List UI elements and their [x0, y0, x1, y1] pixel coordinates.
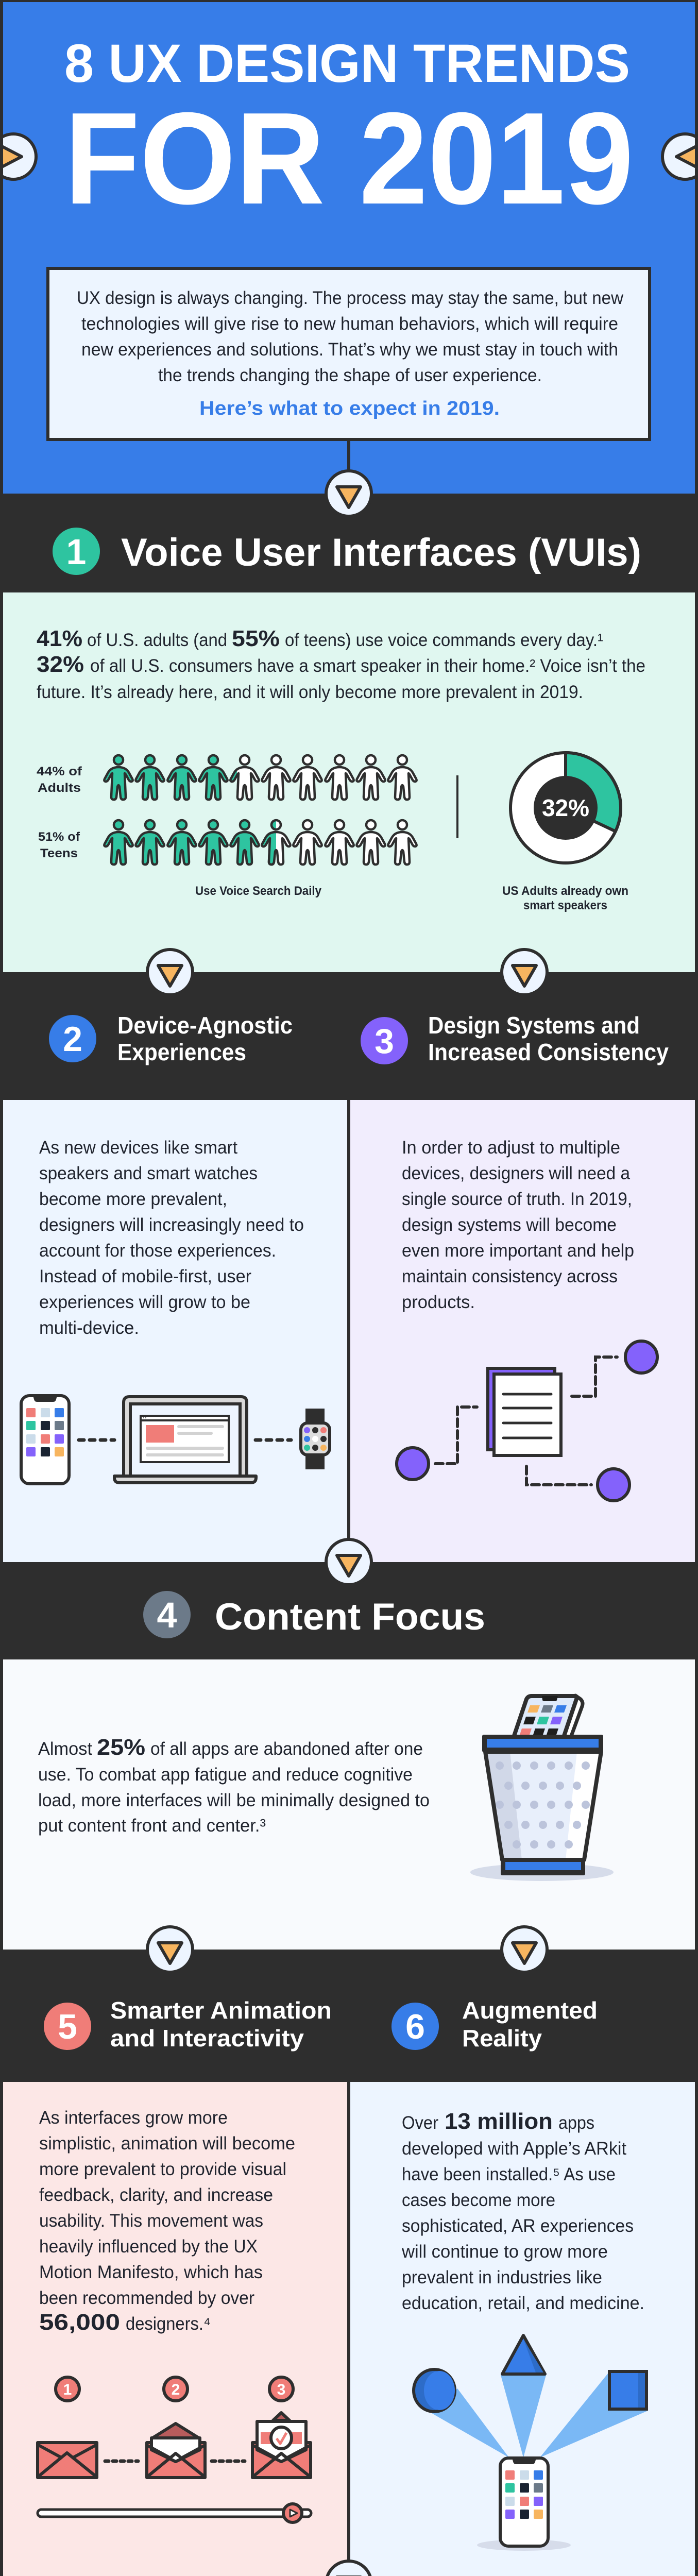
- body text: [38, 1735, 430, 1836]
- body text: usability. This movement was: [39, 2211, 263, 2231]
- section 3 heading: Increased Consistency: [428, 1039, 669, 1065]
- connector dots: [105, 2460, 138, 2463]
- body text: As new devices like smart: [39, 1138, 237, 1158]
- body text: education, retail, and medicine.: [402, 2293, 644, 2313]
- body text: load, more interfaces will be minimally designed to: [38, 1790, 430, 1810]
- stat text: 41%: [37, 626, 82, 651]
- arrow: sections 2 and 3 to section 4: [326, 1539, 371, 1585]
- icon: document stack with nodes: [397, 1341, 657, 1501]
- body text: simplistic, animation will become: [39, 2133, 295, 2154]
- header panel: [0, 2, 698, 494]
- section 4 heading: 4: [157, 1595, 177, 1635]
- body text: As interfaces grow more: [39, 2108, 228, 2128]
- arrow: section 1 to section 3: [502, 950, 547, 995]
- pictogram row labels: Teens: [40, 846, 78, 860]
- body text: feedback, clarity, and increase: [39, 2185, 273, 2205]
- section 6 heading: Augmented: [462, 1997, 598, 2024]
- arrow: sections 5 and 6 to section 7: [326, 2561, 371, 2576]
- body text: designers will increasingly need to: [39, 1215, 304, 1235]
- body text: 13 million: [445, 2109, 553, 2134]
- body text: 25%: [97, 1735, 145, 1760]
- intro box: UX design is always changing. The process may stay the same, but new: [77, 288, 624, 308]
- intro box: new experiences and solutions. That’s why we must stay in touch with: [81, 340, 618, 360]
- body text: Motion Manifesto, which has: [39, 2262, 263, 2282]
- body text: become more prevalent,: [39, 1189, 227, 1209]
- section 1 heading: Voice User Interfaces (VUIs): [121, 531, 641, 574]
- animation slider: [38, 2504, 311, 2522]
- section 4 heading: Content Focus: [215, 1596, 485, 1638]
- icon: ar sphere: [414, 2369, 455, 2412]
- arrow: section 1 to section 2: [147, 950, 193, 995]
- stat text: of all U.S. consumers have a smart speaker in their home.² Voice isn’t the: [90, 656, 645, 676]
- connector: laptop to watch: [256, 1438, 291, 1442]
- icon: ar cone: [502, 2335, 545, 2374]
- pictogram row labels: 51% of: [38, 830, 80, 844]
- body text: Instead of mobile-first, user: [39, 1266, 251, 1286]
- section 1 heading: 1: [66, 532, 86, 572]
- body text: more prevalent to provide visual: [39, 2159, 286, 2179]
- body text: will continue to grow more: [401, 2242, 608, 2262]
- section 5 heading: Smarter Animation: [110, 1997, 332, 2024]
- body text: use. To combat app fatigue and reduce cognitive: [38, 1765, 413, 1785]
- body text: 56,000: [39, 2310, 120, 2335]
- stat text: 55%: [232, 626, 280, 651]
- body text: sophisticated, AR experiences: [402, 2216, 634, 2236]
- intro box: Here’s what to expect in 2019.: [199, 398, 500, 419]
- body text: In order to adjust to multiple: [402, 1138, 620, 1158]
- panel: content focus: [3, 1659, 695, 1950]
- connector: phone to laptop: [79, 1438, 114, 1442]
- section 5 heading: and Interactivity: [110, 2025, 304, 2052]
- stat text: [37, 626, 645, 702]
- panel: voice user interfaces: [3, 592, 695, 972]
- body text: of all apps are abandoned after one: [150, 1739, 423, 1759]
- section 4 heading: [143, 1591, 485, 1638]
- body text: maintain consistency across: [402, 1266, 618, 1286]
- step number badges: 1: [63, 2381, 72, 2398]
- section 5 heading: [44, 1997, 332, 2052]
- donut chart: [510, 753, 621, 863]
- arrow: section 4 to section 5: [147, 1927, 193, 1972]
- body text: prevalent in industries like: [402, 2267, 602, 2287]
- pictogram row labels: [37, 765, 82, 860]
- body text: heavily influenced by the UX: [39, 2236, 258, 2257]
- body text: Almost: [38, 1739, 92, 1759]
- icon: left side arrow: [0, 134, 36, 179]
- pictogram caption: Use Voice Search Daily: [195, 884, 322, 898]
- step number badges: 2: [172, 2381, 180, 2398]
- section 5 heading: 5: [58, 2007, 77, 2046]
- body text: [401, 2109, 644, 2313]
- icon: phone: [21, 1396, 69, 1484]
- body text: multi-device.: [39, 1318, 139, 1338]
- body text: single source of truth. In 2019,: [402, 1189, 632, 1209]
- body text: been recommended by over: [39, 2288, 254, 2308]
- intro box: [48, 268, 650, 439]
- donut caption: smart speakers: [523, 899, 607, 912]
- section 2 heading: 2: [63, 1020, 82, 1059]
- intro box: the trends changing the shape of user experience.: [158, 365, 542, 385]
- stat text: future. It’s already here, and it will only become more prevalent in 2019.: [37, 682, 583, 702]
- icon: projected beams: [432, 2374, 648, 2458]
- section 6 heading: [391, 1997, 598, 2052]
- panel: smarter animation: [3, 2082, 347, 2576]
- donut caption: [502, 884, 628, 912]
- body text: speakers and smart watches: [39, 1163, 258, 1183]
- title line two: FOR 2019: [64, 85, 634, 231]
- step number badges: 3: [277, 2381, 285, 2398]
- section 3 heading: 3: [374, 1022, 394, 1061]
- body text: account for those experiences.: [39, 1241, 276, 1261]
- stat text: 32%: [37, 652, 84, 677]
- stat text: of U.S. adults (and: [87, 630, 227, 650]
- icon: smart watch: [301, 1409, 330, 1469]
- body text: apps: [558, 2113, 594, 2133]
- section 2 heading: Experiences: [117, 1039, 246, 1065]
- icon: ar cube: [609, 2371, 646, 2409]
- body text: experiences will grow to be: [39, 1292, 250, 1312]
- arrow: intro to section 1: [326, 471, 371, 516]
- donut caption: US Adults already own: [502, 884, 628, 898]
- body text: Over: [402, 2113, 438, 2133]
- body text: [402, 1138, 634, 1312]
- body text: design systems will become: [402, 1215, 617, 1235]
- step number badges: [56, 2377, 293, 2401]
- body text: put content front and center.³: [38, 1816, 266, 1836]
- stat text: of teens) use voice commands every day.¹: [285, 630, 603, 650]
- pictogram: 51 percent of teens: [104, 820, 417, 865]
- icon: ar phone: [500, 2458, 548, 2546]
- body text: have been installed.⁵ As use: [402, 2164, 616, 2184]
- section 2 heading: [49, 1012, 293, 1065]
- body text: developed with Apple’s ARkit: [402, 2139, 626, 2159]
- icon: closed envelope: [38, 2443, 97, 2478]
- pictogram: 44 percent of adults: [104, 755, 417, 800]
- section 3 heading: Design Systems and: [428, 1012, 640, 1039]
- body text: [39, 2108, 295, 2335]
- body text: [39, 1138, 304, 1338]
- panel: augmented reality: [350, 2082, 695, 2576]
- icon: laptop: [114, 1397, 256, 1483]
- title line one: 8 UX DESIGN TRENDS: [64, 33, 630, 94]
- shadow: [477, 2539, 571, 2551]
- icon: phone in trash can: [470, 1696, 614, 1881]
- donut chart: 32%: [542, 794, 589, 821]
- icon: opening envelope: [147, 2424, 205, 2478]
- panel: device-agnostic experiences: [3, 1100, 347, 1562]
- arrow: section 4 to section 6: [502, 1927, 547, 1972]
- body text: devices, designers will need a: [402, 1163, 631, 1183]
- body text: even more important and help: [402, 1241, 634, 1261]
- intro box: technologies will give rise to new human behaviors, which will require: [81, 314, 618, 334]
- section 6 heading: 6: [405, 2007, 425, 2046]
- section 6 heading: Reality: [462, 2025, 542, 2052]
- icon: open envelope with check: [252, 2413, 311, 2478]
- pictogram row labels: Adults: [38, 781, 81, 795]
- pictogram row labels: 44% of: [37, 765, 82, 778]
- connector dots: [212, 2460, 245, 2463]
- body text: cases become more: [402, 2190, 555, 2210]
- section 2 heading: Device-Agnostic: [117, 1012, 293, 1039]
- icon: right side arrow: [662, 134, 698, 179]
- panel: design systems: [350, 1100, 695, 1562]
- section 3 heading: [361, 1012, 669, 1065]
- body text: products.: [402, 1292, 475, 1312]
- body text: designers.⁴: [126, 2314, 211, 2334]
